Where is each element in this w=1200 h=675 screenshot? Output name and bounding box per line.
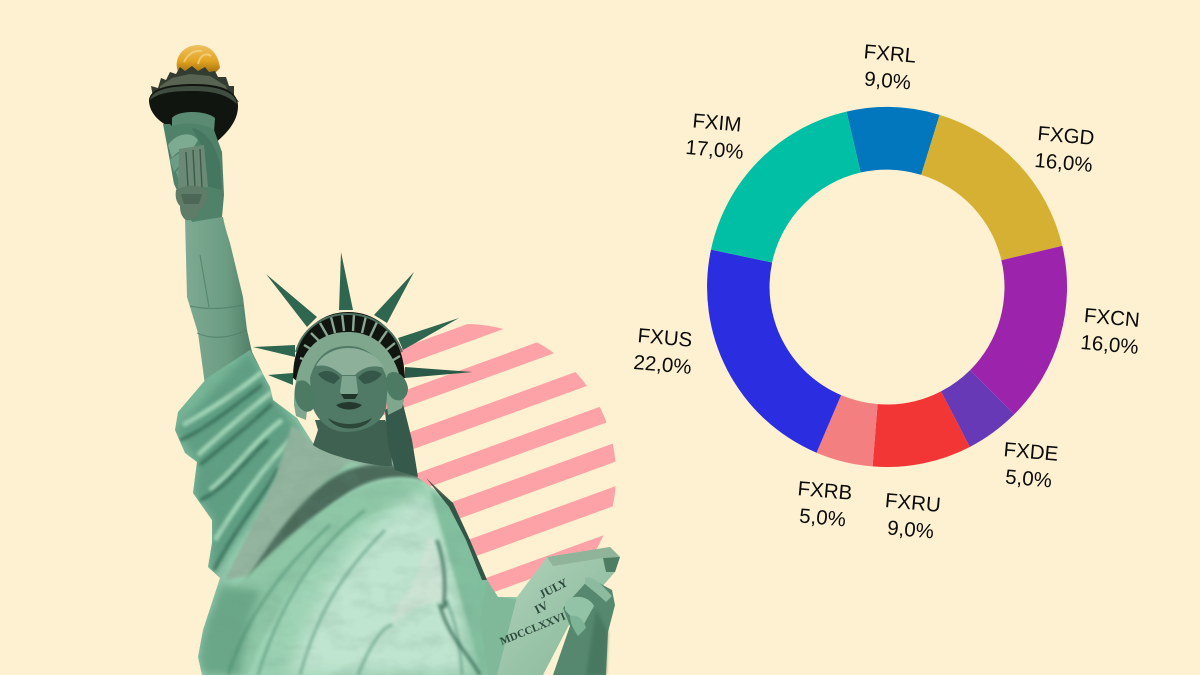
robe folds — [175, 350, 488, 675]
robe vertical fold lines — [228, 510, 462, 675]
hand holding tablet — [553, 577, 615, 675]
lower arm near tablet — [480, 580, 520, 675]
label: FXCN — [1080, 304, 1142, 359]
label: FXRB: 5,0% — [798, 504, 847, 531]
label: FXRU: FXRU — [884, 489, 942, 517]
hand and torch handle — [163, 112, 224, 222]
donut chart — [707, 107, 1067, 467]
icon: torch gallery and bowl — [149, 66, 239, 144]
face — [310, 346, 388, 432]
left lower robe — [198, 585, 262, 675]
label: FXRU: 9,0% — [886, 516, 935, 543]
label: FXUS: FXUS — [637, 324, 693, 352]
label: FXRL: 9,0% — [863, 67, 912, 94]
crown window bars — [300, 314, 400, 362]
label: FXUS: 22,0% — [633, 351, 693, 379]
Statue of Liberty — [149, 45, 620, 675]
label: FXGD: 16,0% — [1034, 149, 1094, 177]
icon: tablet: IV — [532, 598, 551, 617]
label: FXCN: 16,0% — [1080, 331, 1140, 359]
neck — [313, 420, 392, 466]
slice: FXRU — [873, 391, 970, 467]
arm raised — [185, 217, 262, 400]
robe body — [175, 350, 517, 675]
right robe fold — [430, 490, 488, 674]
label: FXCN: FXCN — [1083, 304, 1141, 332]
icon: tablet — [497, 547, 620, 675]
icon: torch flame — [177, 45, 220, 72]
face details — [316, 348, 384, 428]
label: FXRL — [860, 40, 917, 95]
label: FXIM: FXIM — [692, 109, 742, 137]
mottled patina — [220, 390, 468, 675]
label: FXDE: 5,0% — [1004, 465, 1053, 492]
label: FXUS — [633, 324, 695, 379]
label: FXDE — [1000, 438, 1059, 493]
sash dark band — [246, 464, 422, 578]
sash light band — [240, 480, 427, 674]
label: FXRB: FXRB — [797, 477, 853, 505]
hair falling right — [385, 400, 418, 477]
drape at the knee — [392, 535, 444, 625]
label: FXGD — [1034, 122, 1096, 177]
chest area — [226, 425, 394, 580]
slice: FXCN — [970, 246, 1067, 414]
tablet inscription: JULY — [537, 575, 570, 602]
crown band — [293, 312, 405, 382]
striped pink circle — [383, 324, 616, 592]
label: FXRB — [794, 477, 853, 532]
infographic canvas — [149, 44, 1139, 675]
arm detail — [190, 255, 247, 337]
label: FXRU — [882, 489, 942, 544]
label: FXGD: FXGD — [1037, 122, 1095, 150]
label: FXIM: 17,0% — [685, 136, 745, 164]
sleeve dark folds — [180, 385, 278, 570]
hair headband — [294, 332, 404, 420]
label: FXIM — [685, 109, 747, 164]
slice: FXDE — [941, 370, 1014, 447]
slice: FXRB — [816, 395, 878, 466]
label: FXRL: FXRL — [863, 40, 917, 68]
main robe highlight — [290, 490, 470, 675]
slice: FXRL — [846, 107, 940, 175]
label: FXDE: FXDE — [1003, 438, 1059, 466]
slice: FXIM — [711, 112, 861, 262]
crown spikes — [253, 252, 473, 385]
hair side curls — [295, 380, 316, 412]
slice: FXGD — [921, 115, 1062, 260]
icon: tablet: MDCCLXXVI — [498, 611, 567, 648]
robe right edge shadow — [426, 478, 487, 580]
sleeve highlights — [183, 372, 290, 540]
slice: FXUS — [707, 250, 841, 453]
sleeve shading — [175, 350, 300, 578]
